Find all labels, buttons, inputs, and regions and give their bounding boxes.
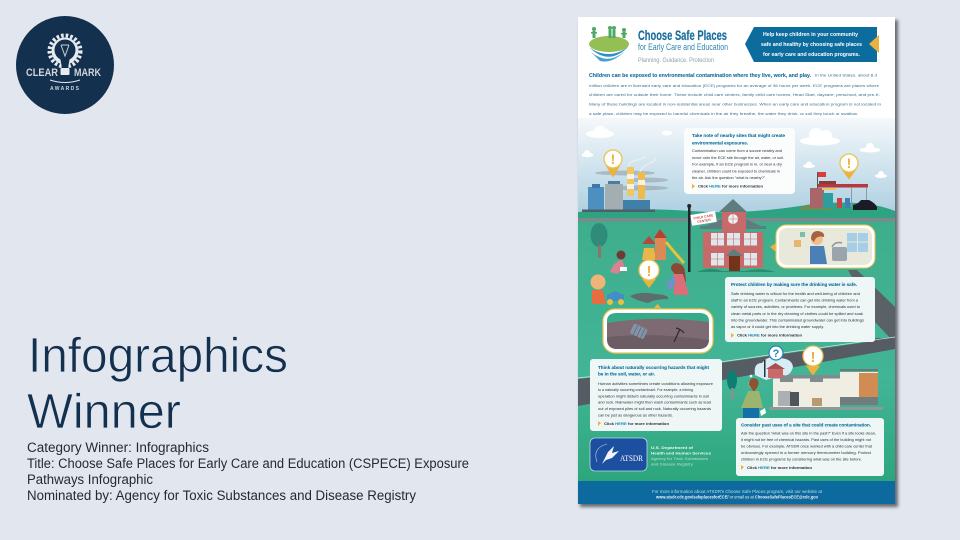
panel: past uses card: be obvious. For example, ATSDR once worked with a child care center that [741,444,872,448]
footer band: www.atsdr.cdc.gov/safeplacesforECE/ or email us at ChooseSafePlacesECE@cdc.gov [655,494,819,500]
panel: naturally occurring hazards card: can be just as dangerous as other hazards. [598,414,673,418]
panel: past uses card [736,418,884,476]
poster drop shadow [580,20,898,507]
illustration: woman with papers [741,378,766,418]
illustration: gas station [798,172,877,210]
illustration: playground and slide [590,223,684,263]
smoke plumes [595,170,668,190]
panel: naturally occurring hazards card: out of exposed piles of soil and rock. Naturally occurring hazards [598,407,711,411]
illustration: child care center sign: CENTER [697,218,712,224]
illustration: factory [582,156,656,212]
intro text block: million children are in licensed early care and education (ECE) programs for an average of 36 hours per week. ECE programs are places where [589,84,879,88]
header: blue callout banner: for early care and education programs. [763,52,861,58]
icon: gear and light bulb [50,36,80,75]
heading: Infographics Winner: Infographics [28,329,288,383]
logo: Clear Mark Awards: CLEAR [26,67,58,79]
panel: nearby sites card: Take note of nearby sites that might create [692,133,785,138]
header: title: for Early Care and Education [638,42,728,52]
heading: Infographics Winner [27,329,288,439]
icon: warning pin factory [604,150,622,178]
award details text block: Category Winner: Infographics [27,440,209,455]
logo: Clear Mark Awards: MARK [74,67,101,79]
panel: drinking water card: Protect children by making sure the drinking water is safe. [731,282,857,287]
panel: naturally occurring hazards card: operation might disturb naturally occurring contaminants in soil [598,394,709,398]
intro text block: In the United States, about 8.3 [815,74,877,78]
illustration: child care center sign: CHILD CARE [693,213,714,221]
header: blue callout banner: Help keep children in your community [763,32,858,38]
panel: naturally occurring hazards card: and rock. Rainwater might then wash contaminants such as lead [598,400,711,404]
logo: Clear Mark Awards [16,16,114,114]
panel: naturally occurring hazards card: Human activities sometimes create conditions allowing exposure [598,382,713,386]
logo: ATSDR: ATSDR [620,454,644,463]
award details text block: Pathways Infographic [27,472,153,487]
illustration: child crawling [610,250,627,274]
header: title: Planning. Guidance. Protection [638,57,714,64]
callout: soil cross section [603,304,713,353]
award details text block [27,440,469,503]
ground: hills, road and grass [578,202,895,481]
footer band [578,481,895,504]
icon: warning pin buildings [803,346,823,376]
illustration: repurposed buildings [769,369,883,410]
intro text block [589,73,881,116]
award details text block: Nominated by: Agency for Toxic Substances and Disease Registry [27,488,416,503]
panel: past uses card: it might not be free of chemical hazards. Past uses of the building might not [741,438,871,442]
thought bubble: past use of site: ? [773,348,780,360]
panel: nearby sites card: cleaner, children could be exposed to chemicals in [692,170,780,174]
thought bubble: past use of site [750,346,793,380]
panel: nearby sites card: For example, if an ECE program is in, or near a dry [692,162,782,166]
panel: drinking water card: clean metal parts or in the dry cleaning of clothes could be spilled and soak [731,312,863,316]
icon: warning pin playground [639,260,659,288]
panel: past uses card: Click HERE for more information [747,466,812,470]
icon: warning pin gas station: ! [847,155,851,171]
heading: Infographics Winner: Winner [27,385,181,439]
header: title [638,28,728,64]
panel: drinking water card: Click HERE for more information [737,334,802,338]
panel: past uses card: children in ECE programs by considering what was on the site before. [741,458,862,462]
scene: sky [578,118,895,213]
intro text block: a safe place, children may be exposed to harmful chemicals in the air they breathe, the water they drink, or soil they touch or swallow. [589,112,858,116]
panel: naturally occurring hazards card [590,359,722,431]
header: blue callout banner: safe and healthy by choosing safe places [761,42,862,48]
logo: ATSDR [590,438,647,471]
panel: nearby sites card: move onto the ECE site through the air, water, or soil. [692,156,784,160]
icon: warning pin factory: ! [611,151,615,167]
illustration: tree near building [727,370,737,400]
panel: nearby sites card [684,128,795,194]
panel: nearby sites card: Contamination can come from a source nearby and [692,149,782,153]
illustration: child care center sign [687,204,717,272]
panel: nearby sites card: Click HERE for more information [698,184,763,188]
icon: clouds [582,126,887,178]
panel: past uses card: unknowingly opened in a former mercury thermometer building. Protect [741,451,871,455]
header: CSPECE logo [589,26,629,62]
panel: past uses card: Consider past uses of a site that could create contamination. [741,422,871,428]
panel: naturally occurring hazards card: to a naturally occurring contaminant. For example, a mining [598,388,693,392]
icon: warning pin buildings: ! [810,349,816,366]
panel: drinking water card: variety of sources, activities, or problems. For example, chemicals used to [731,305,860,309]
panel: past uses card: Ask the question “what was on this site in the past?” Even if a site looks clean, [741,432,876,436]
panel: drinking water card: Safe drinking water is critical for the health and well-being of children and [731,292,860,296]
callout: child at water fountain [770,225,875,268]
panel: drinking water card: as vapor or it could get into the drinking water supply. [731,325,824,329]
panel: nearby sites card: the air. Ask the question “what is nearby?” [692,176,765,180]
footer band: For more information about ATSDR’s Choose Safe Places program, visit our website at [652,489,823,494]
intro text block: Children can be exposed to environmental contamination where they live, work, and play. [589,73,811,79]
header: title: Choose Safe Places [638,28,727,43]
panel: drinking water card: into the groundwater. This contaminated groundwater can get into buildings [731,318,864,322]
panel: naturally occurring hazards card: Click HERE for more information [604,422,669,426]
agency text: Health and Human Services [651,450,712,456]
intro text block: children are cared for outside their home. These include child care centers, family child care homes, Head Start, daycare, preschool, and pre-K. [589,93,880,97]
logo: Clear Mark Awards: AWARDS [50,86,80,92]
panel: poster [578,17,895,504]
contaminated ground patch [630,293,668,303]
agency text: Agency for Toxic Substances [651,456,708,461]
agency text [651,445,712,466]
panel: drinking water card: staff in an ECE program. Contaminants can get into drinking water from a [731,298,858,302]
icon: warning pin gas station [840,154,858,180]
illustration: child with toy truck [590,274,624,305]
panel: drinking water card [725,277,875,342]
panel: nearby sites card: environmental exposures. [692,140,748,146]
illustration: girl holding baby [666,263,689,295]
icon: warning pin playground: ! [646,263,652,280]
header: blue callout banner [745,27,879,62]
intro text block: Many of these buildings are located in non-residential areas near other businesses. When an early care and education program is not located in [589,102,881,106]
panel: naturally occurring hazards card: be in the soil, water, or air. [598,372,655,376]
award details text block: Title: Choose Safe Places for Early Care and Education (CSPECE) Exposure [27,456,469,471]
agency text: and Disease Registry [651,462,693,466]
panel: naturally occurring hazards card: Think about naturally occurring hazards that might [598,365,709,370]
illustration: child care center school [697,199,775,272]
agency text: U.S. Department of [651,445,694,450]
